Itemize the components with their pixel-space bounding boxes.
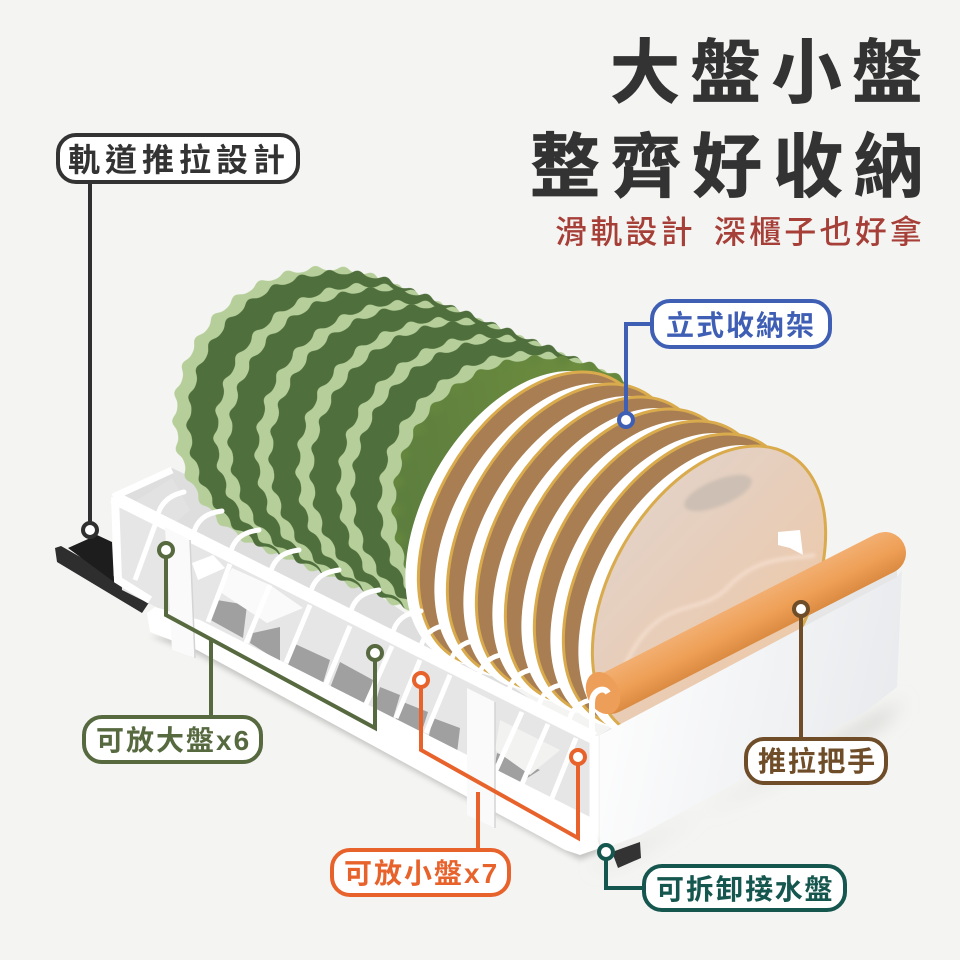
callout: holds 7 small plates: 可放小盤x7 xyxy=(344,858,499,889)
plate: gold 3 xyxy=(463,396,680,689)
plate: green 2 xyxy=(213,282,457,578)
plate: green 5 xyxy=(336,334,580,611)
tray floor patches xyxy=(207,600,540,787)
wooden push-pull handle xyxy=(579,553,885,735)
callout: removable drip tray xyxy=(599,845,845,910)
plate: gold 5 xyxy=(521,420,740,713)
callout: push-pull handle: 推拉把手 xyxy=(758,745,877,777)
green plates xyxy=(172,266,624,611)
plate: gold 6 xyxy=(550,432,768,726)
rack shadow xyxy=(160,640,905,870)
callout: vertical storage rack xyxy=(619,301,830,427)
left post xyxy=(165,527,195,658)
end wall xyxy=(600,570,902,850)
rack front lattice xyxy=(113,470,600,860)
subtitle: 滑軌設計 深櫃子也好拿 xyxy=(555,214,925,250)
callout: holds 6 large plates: 可放大盤x6 xyxy=(96,725,251,756)
corner post xyxy=(590,736,598,848)
illustration: dish rack xyxy=(55,214,905,870)
title: 整齊好收納 xyxy=(530,128,935,206)
title xyxy=(530,34,935,206)
slide rail xyxy=(55,535,641,868)
rack wire arches xyxy=(157,492,595,724)
right post xyxy=(467,688,495,828)
rack back wall and side panel xyxy=(113,468,897,820)
lower tray shadow xyxy=(150,636,600,860)
plate: green 6 xyxy=(377,350,624,590)
lattice interior xyxy=(118,505,592,825)
callout: slide rail design: 軌道推拉設計 xyxy=(68,142,290,178)
plate: green 4 xyxy=(295,316,539,610)
lattice slats xyxy=(135,525,576,798)
top rail xyxy=(113,497,594,738)
side rail xyxy=(113,470,172,497)
callout: push-pull handle xyxy=(746,602,886,783)
callout: removable drip tray: 可拆卸接水盤 xyxy=(656,874,834,905)
callout: vertical storage rack: 立式收納架 xyxy=(666,310,816,341)
callout: holds 7 small plates xyxy=(332,673,585,895)
plate: gold 2 xyxy=(434,382,653,676)
gold rim plates xyxy=(405,370,828,728)
title: 大盤小盤 xyxy=(610,34,933,112)
plate: gold 4 xyxy=(492,408,710,701)
plate: green 3 xyxy=(254,300,498,594)
callout: holds 6 large plates xyxy=(84,543,382,762)
lower tray xyxy=(147,607,600,855)
plate: gold front, translucent xyxy=(578,444,828,728)
callout: slide rail design xyxy=(58,135,298,537)
plate: gold 1 xyxy=(405,370,622,664)
plate: green 1 xyxy=(172,266,416,560)
